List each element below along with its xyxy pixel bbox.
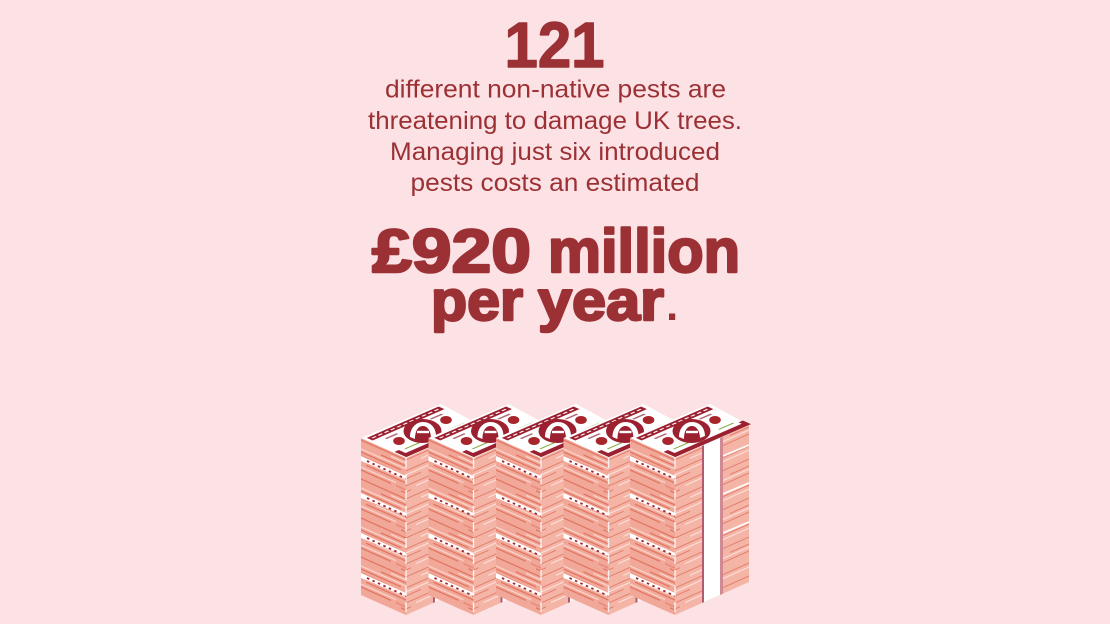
highlighted figure: £920 million per year [372, 217, 740, 333]
highlighted figure: £920 million per year: year [538, 269, 664, 333]
banknote stack 1 [361, 404, 482, 615]
banknote stack 4 [564, 404, 684, 615]
body text block: different non-native pests are [385, 76, 726, 104]
highlighted figure: £920 million per year: £920 [372, 217, 531, 285]
banknote stack 2 [428, 404, 549, 615]
banknote stack 5 [630, 404, 751, 615]
body text block: Managing just six introduced [390, 138, 720, 166]
highlighted figure: £920 million per year: per [431, 269, 523, 333]
headline number: 121: 121 [504, 9, 604, 81]
highlighted figure: £920 million per year: million [548, 217, 740, 285]
banknote stack 3 [496, 404, 617, 615]
body text block: threatening to damage UK trees. [368, 107, 742, 135]
body text block: pests costs an estimated [410, 169, 700, 197]
body text block [368, 76, 742, 197]
illustration: stacks of banknotes [361, 404, 751, 615]
highlighted figure: £920 million per year: . [666, 281, 678, 330]
